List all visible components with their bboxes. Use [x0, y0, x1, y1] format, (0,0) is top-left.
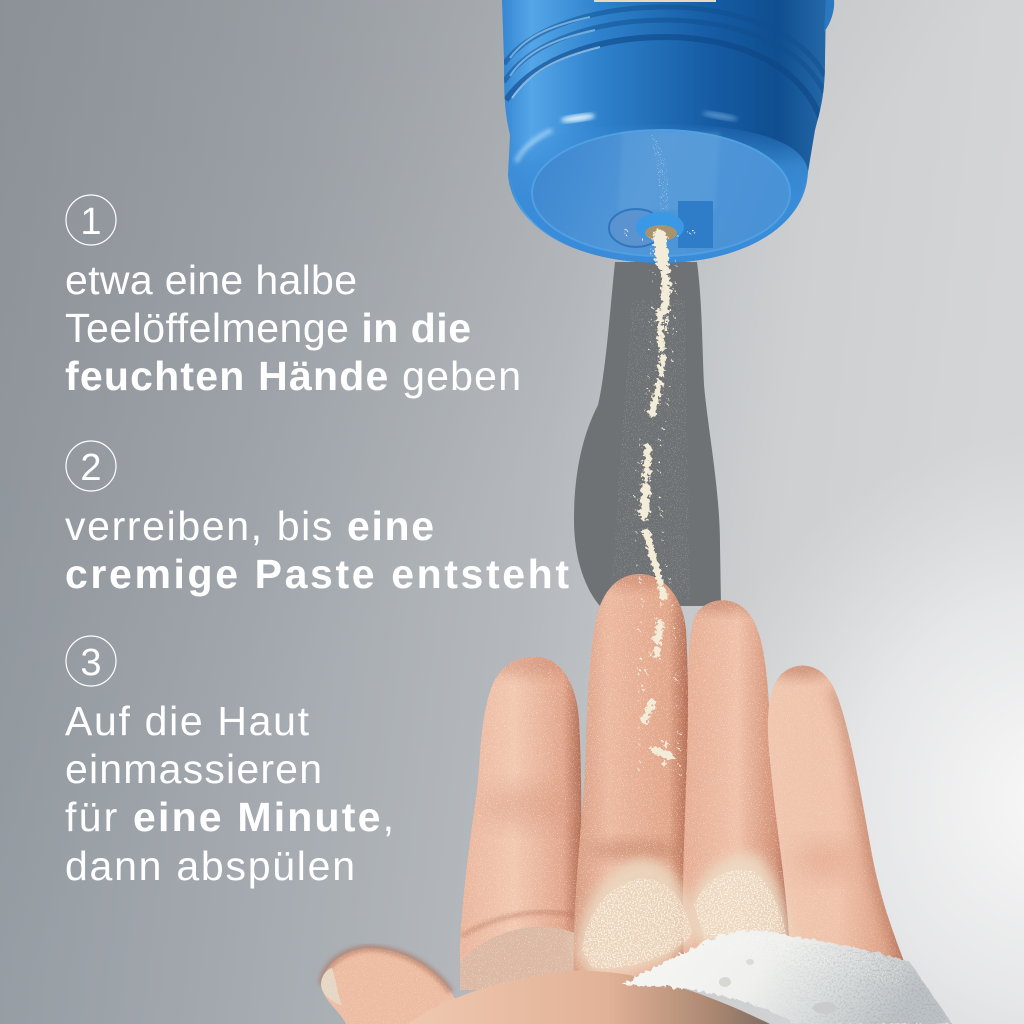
- number badge 2: 2: [80, 447, 102, 489]
- nozzle: [636, 212, 684, 242]
- powder stream: [625, 230, 700, 790]
- step 3 text: einmassieren: [65, 746, 322, 792]
- step 1 text: etwa eine halbe: [65, 257, 357, 303]
- step 3 text: Auf die Haut: [65, 698, 310, 744]
- top label sliver: [594, 0, 716, 2]
- powder mound on middle finger: [575, 858, 696, 975]
- powder grains: [625, 230, 700, 790]
- rim highlights: [516, 110, 738, 162]
- powder shadow: [574, 262, 721, 606]
- bottle: [502, 0, 834, 263]
- powder mound on ring finger: [689, 854, 792, 945]
- step 3 text: für eine Minute,: [65, 794, 394, 840]
- ribs: [504, 7, 825, 122]
- number badge 3: [66, 636, 116, 686]
- bottle body: [502, 0, 826, 263]
- number badge 3: 3: [80, 642, 102, 684]
- step 2 text: verreiben, bis eine: [65, 503, 434, 549]
- step 3: [65, 636, 394, 889]
- number badge 1: 1: [80, 201, 102, 243]
- step 1 text: feuchten Hände geben: [65, 353, 521, 399]
- square recess: [678, 201, 713, 248]
- step 1: [65, 195, 521, 399]
- disc reflection: [618, 132, 720, 210]
- step 2 text: cremige Paste entsteht: [65, 551, 569, 597]
- step 3 text: dann abspülen: [65, 843, 355, 889]
- number badge 2: [66, 441, 116, 491]
- base rim: [510, 124, 808, 263]
- palm: [408, 971, 770, 1024]
- nozzle opening: [645, 225, 677, 241]
- oval recess: [609, 209, 663, 247]
- powder clumps: [643, 236, 670, 764]
- side clip: [824, 0, 834, 32]
- falling powder on disc: [650, 132, 668, 210]
- step 2 text: [65, 503, 569, 597]
- step 2: [65, 441, 569, 597]
- finger 1: [458, 648, 585, 995]
- foam: [622, 930, 952, 1024]
- step 3 text: [65, 698, 394, 889]
- hand: [321, 564, 952, 1024]
- step 1 text: [65, 257, 521, 399]
- base disc: [532, 130, 790, 256]
- finger 2: [574, 564, 692, 985]
- finger 3: [683, 588, 792, 960]
- step 1 text: Teelöffelmenge in die: [65, 305, 471, 351]
- number badge 1: [66, 195, 116, 245]
- finger 4: [768, 666, 904, 960]
- thumb: [321, 948, 470, 1024]
